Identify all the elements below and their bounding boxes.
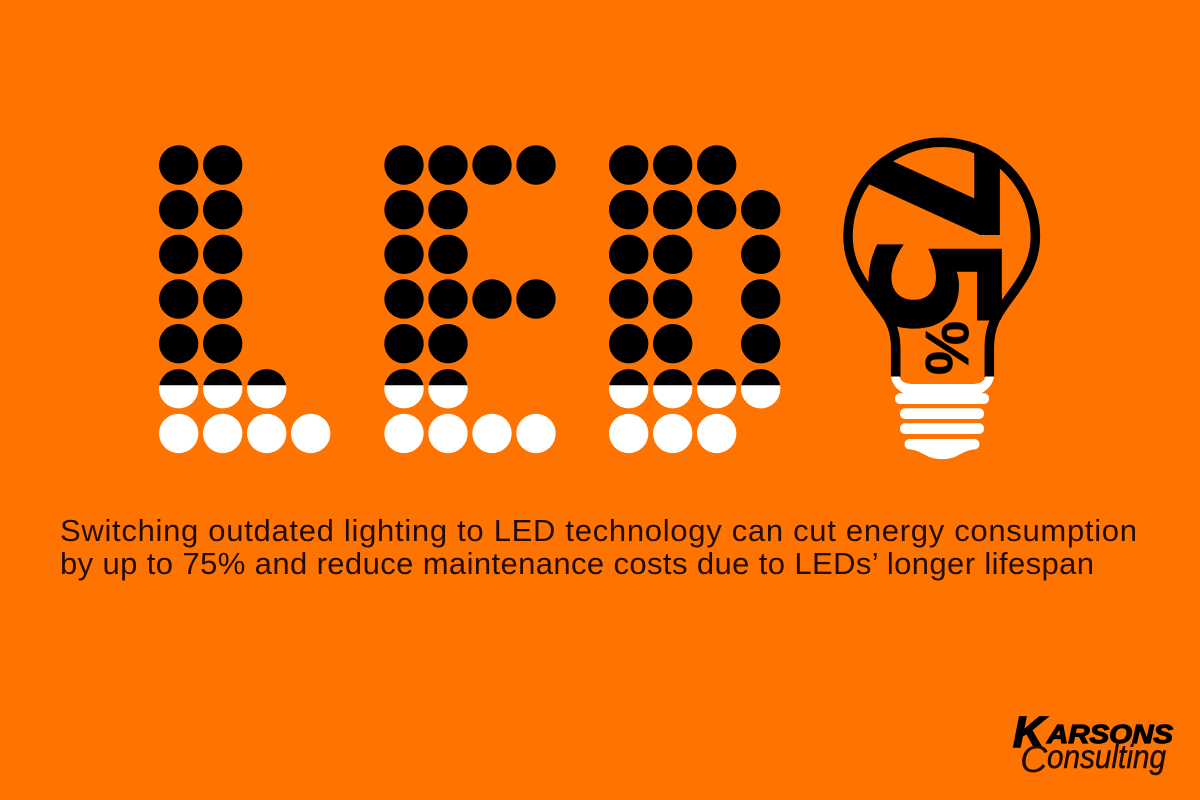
- logo: Karsons Consulting: [1013, 708, 1174, 781]
- text block: description: by up to 75% and reduce maintenance costs due to LEDs’ longer lifespan: [60, 546, 1094, 581]
- logo: Karsons Consulting: K: [1013, 708, 1048, 757]
- letter D made of dots: [609, 145, 780, 453]
- rotated percent sign: %: [913, 321, 981, 375]
- infographic canvas: [62, 138, 1174, 776]
- letter L made of dots: [159, 145, 330, 453]
- icon: light bulb with 75%: [843, 138, 1040, 460]
- text block: description: [60, 513, 1137, 581]
- logo: Karsons Consulting: onsulting: [1047, 738, 1167, 775]
- bulb glass outline: [848, 142, 1035, 377]
- rotated 75 figure: [865, 142, 1002, 329]
- rotated 75 figure: 7: [821, 121, 1037, 250]
- text block: description: Switching outdated lighting to LED technology can cut energy consumption: [60, 513, 1137, 548]
- letter E made of dots: [384, 145, 556, 453]
- bulb screw base: [891, 376, 994, 459]
- logo: Karsons Consulting: ARSONS: [1046, 719, 1174, 749]
- logo: Karsons Consulting: C: [1020, 739, 1048, 781]
- rotated 75 figure: 5: [828, 232, 1036, 339]
